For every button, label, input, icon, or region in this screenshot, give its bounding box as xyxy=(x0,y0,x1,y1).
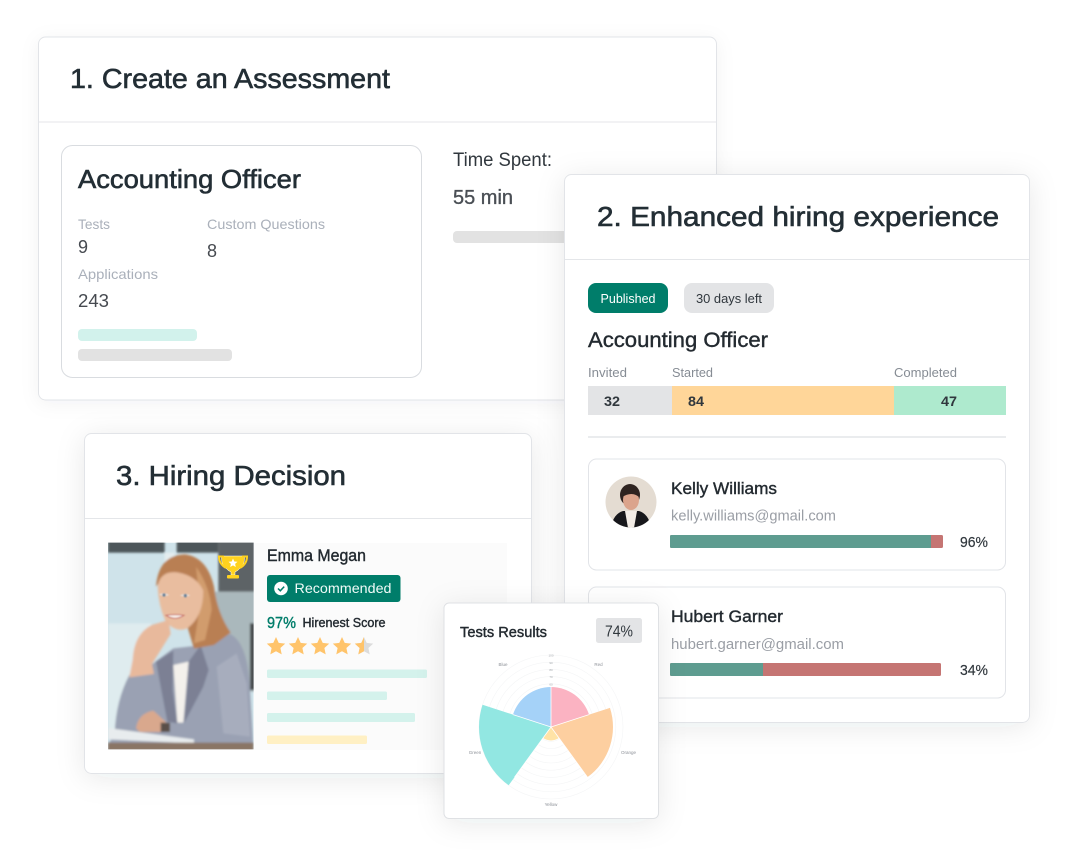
candidate name: Emma Megan xyxy=(267,547,366,565)
icon: trophy xyxy=(219,556,247,578)
badge: 74 percent: 74% xyxy=(605,624,633,640)
summary placeholder bars xyxy=(267,670,427,744)
candidate card: hubert garner: 34% xyxy=(960,662,988,679)
candidate card: kelly williams: 96% xyxy=(960,534,988,551)
heading: hiring decision: 3. Hiring Decision xyxy=(116,460,346,491)
segment: yellow xyxy=(543,727,559,741)
polar area chart: 90 xyxy=(549,661,553,665)
polar area chart: Blue xyxy=(498,662,508,667)
card: accounting officer summary: 9 xyxy=(78,237,88,257)
badge: recommended xyxy=(267,575,400,602)
score xyxy=(267,615,386,632)
panel: hiring decision xyxy=(84,434,532,774)
funnel bar: 32 xyxy=(604,393,620,409)
card: accounting officer summary: 243 xyxy=(78,291,109,311)
card: accounting officer summary xyxy=(62,146,422,378)
polar area chart: Orange xyxy=(621,750,636,755)
badge: 30 days left: 30 days left xyxy=(696,292,763,306)
time spent block xyxy=(453,150,568,243)
photo: emma megan xyxy=(108,540,255,751)
icon: kelly avatar xyxy=(605,476,657,528)
panel: enhanced hiring experience xyxy=(564,174,1030,722)
heading: tests results: Tests Results xyxy=(460,624,547,641)
panel: create an assessment xyxy=(38,37,716,400)
polar area chart: Red xyxy=(594,662,603,667)
segment: red xyxy=(551,687,589,727)
badge: 30 days left xyxy=(684,283,774,313)
segment: orange xyxy=(551,708,613,777)
badge: published xyxy=(588,283,668,313)
star rating xyxy=(267,637,373,654)
polar area chart: 70 xyxy=(549,675,553,679)
candidate card: kelly williams: Kelly Williams xyxy=(671,479,777,498)
funnel bar: Started xyxy=(672,365,713,380)
candidate card: hubert garner xyxy=(588,587,1006,698)
polar area chart: Green xyxy=(469,750,482,755)
funnel bar: 84 xyxy=(688,393,704,409)
score: Hirenest Score xyxy=(302,616,386,630)
candidate card: hubert garner: Hubert Garner xyxy=(671,607,783,626)
score: 97% xyxy=(267,615,296,632)
funnel bar: Completed xyxy=(894,365,957,380)
candidate card: kelly williams xyxy=(588,459,1006,570)
badge: 74 percent xyxy=(596,618,642,643)
polar area chart: Yellow xyxy=(545,802,558,807)
card: accounting officer summary: Custom Questions xyxy=(207,216,325,232)
polar area chart: 100 xyxy=(548,654,554,658)
funnel bar: 47 xyxy=(941,393,957,409)
card: accounting officer summary: 8 xyxy=(207,241,217,261)
polar area chart xyxy=(469,654,636,807)
time spent block: Time Spent: xyxy=(453,150,552,171)
heading: enhanced hiring experience: 2. Enhanced hiring experience xyxy=(597,201,999,232)
heading: create an assessment: 1. Create an Assessment xyxy=(70,63,390,94)
job title: Accounting Officer xyxy=(588,329,768,352)
card: accounting officer summary: Tests xyxy=(78,216,110,232)
polar area chart: 60 xyxy=(549,682,553,686)
candidate card: kelly williams: kelly.williams@gmail.com xyxy=(671,508,836,524)
candidate card: hubert garner: hubert.garner@gmail.com xyxy=(671,637,844,653)
funnel bar: Invited xyxy=(588,365,627,380)
segment: green xyxy=(479,705,551,785)
badge: published: Published xyxy=(600,292,656,306)
panel: tests results xyxy=(444,603,658,818)
time spent block: 55 min xyxy=(453,187,513,209)
segment: blue xyxy=(513,687,551,727)
card: accounting officer summary: Applications xyxy=(78,266,158,282)
polar area chart: 80 xyxy=(549,668,553,672)
card: accounting officer summary: Accounting Officer xyxy=(78,164,301,194)
funnel bar xyxy=(588,365,1006,415)
badge: recommended: Recommended xyxy=(294,580,392,596)
